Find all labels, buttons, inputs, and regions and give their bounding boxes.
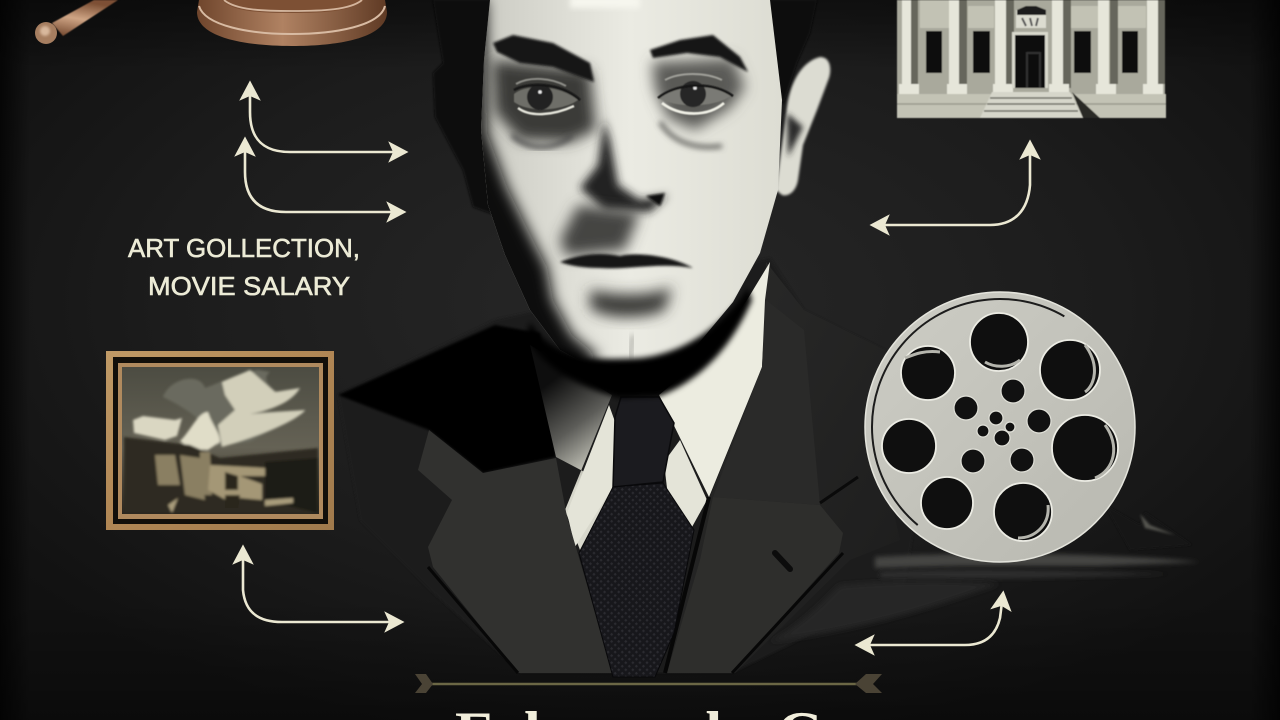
reel hole highlights: [905, 345, 1114, 538]
icon: museum building: [897, 0, 1166, 118]
museum crest: [1016, 6, 1046, 28]
label line 1: ART GOLLECTION,: [128, 235, 360, 263]
right eyebrow: [650, 35, 748, 72]
left eye: [514, 79, 580, 114]
lapel notch and buttonhole: [428, 477, 858, 673]
arrows: left upper pair and lower: [243, 84, 405, 622]
label line 2: MOVIE SALARY: [148, 273, 350, 301]
table surface under reel: [770, 505, 1200, 642]
museum columns: [899, 0, 1163, 94]
arrow 1: [250, 84, 405, 152]
necktie: [579, 397, 694, 677]
right lapel: [667, 497, 843, 673]
left lapel: [418, 430, 613, 673]
right eye socket: [652, 58, 745, 130]
icon: film reel: [820, 247, 1180, 607]
right under-eye crease: [660, 122, 722, 147]
icon: framed painting: [106, 351, 334, 530]
text: art collection label: [128, 235, 360, 301]
left fletching: [415, 674, 433, 693]
museum door: [1012, 32, 1048, 88]
face: [481, 0, 782, 364]
arrow 5: [858, 594, 1003, 645]
arrow 3: [243, 548, 401, 622]
gavel handle: [35, 0, 118, 44]
museum shadows: [911, 0, 1165, 88]
museum steps: [980, 92, 1100, 118]
arrow 2: [245, 140, 403, 212]
chin cleft: [630, 335, 633, 358]
lower lip shadow: [590, 287, 672, 317]
left under-eye crease: [512, 135, 572, 147]
icon: gavel: [35, 0, 387, 46]
museum windows: [926, 31, 1138, 73]
nasal fold shade: [560, 205, 640, 256]
divider with arrow fletching: [415, 674, 882, 693]
shirt and neck: [530, 262, 770, 550]
portrait: man in suit: [338, 0, 915, 677]
museum plinth: [897, 94, 1166, 118]
mouth: [560, 254, 693, 268]
reel small holes: [954, 379, 1051, 473]
left eye socket: [492, 60, 596, 142]
nose shadow: [574, 116, 671, 219]
outer frame: [106, 351, 334, 530]
arrow 4: [873, 143, 1030, 225]
canvas scene: [122, 367, 319, 514]
forehead highlight: [570, 0, 640, 8]
jacket shoulders: [338, 258, 915, 673]
museum facade: [897, 0, 1165, 94]
museum panels: [920, 0, 1146, 28]
arrows: right side: [858, 143, 1030, 645]
right eye: [658, 74, 733, 114]
right fletching: [855, 674, 882, 693]
left cheek shadow: [481, 0, 606, 362]
chin shadow: [526, 288, 752, 398]
gavel base: [197, 0, 387, 46]
reel disc: [865, 292, 1135, 562]
ears and hair: [433, 0, 830, 215]
left eyebrow: [493, 35, 594, 82]
reel large holes: [882, 313, 1118, 541]
